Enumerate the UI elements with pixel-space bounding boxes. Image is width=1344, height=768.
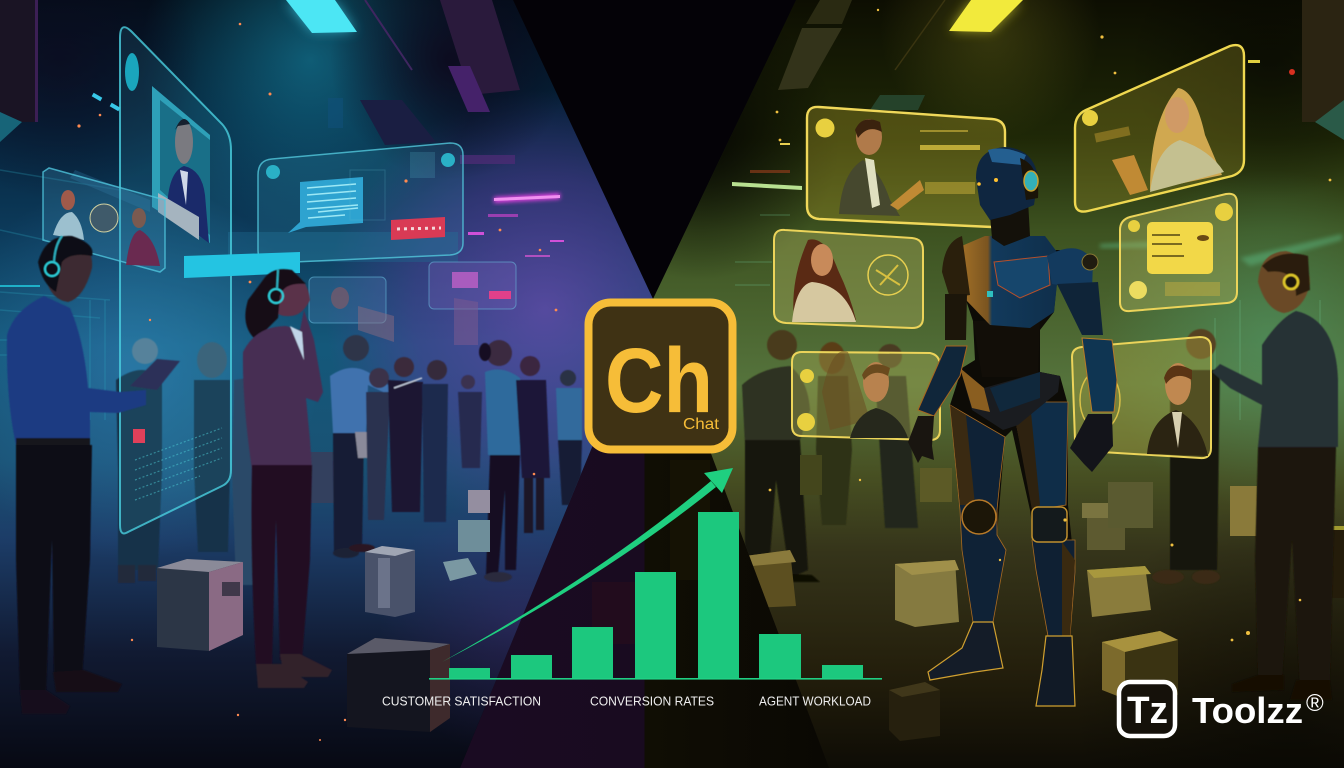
person: woman in dark dress xyxy=(516,356,550,533)
panel: lower centre wedge xyxy=(460,299,829,768)
axis label: customer satisfaction: CUSTOMER SATISFACTION xyxy=(382,694,541,708)
cyan bar xyxy=(184,252,300,278)
person: man with headset xyxy=(7,236,146,714)
person: group xyxy=(366,357,482,522)
small boxes xyxy=(468,490,490,513)
robot: legs xyxy=(928,402,1075,706)
wordmark: Toolzz xyxy=(1192,690,1303,731)
hologram: man with tablet xyxy=(807,107,1005,227)
logo mark: Tz xyxy=(1127,690,1168,732)
person: curly woman xyxy=(194,342,230,552)
box xyxy=(895,560,959,627)
ceiling structure xyxy=(778,0,1344,140)
hologram: chat panel xyxy=(258,143,463,263)
logo letters: Ch xyxy=(605,330,713,432)
icon: ceiling light xyxy=(286,0,357,33)
logo mark xyxy=(1119,682,1175,736)
neon strips xyxy=(0,93,564,287)
video tile xyxy=(152,86,210,243)
racks xyxy=(0,170,120,420)
person: far man xyxy=(556,370,582,505)
icon: panel badge xyxy=(125,53,139,91)
particles xyxy=(77,23,557,741)
logo caption: Chat xyxy=(683,416,720,433)
background crowd xyxy=(116,335,582,585)
red notice xyxy=(391,217,445,240)
box xyxy=(889,682,940,741)
person: man with headset xyxy=(1212,251,1338,700)
chart bars xyxy=(449,512,863,678)
hologram: woman brunette xyxy=(774,230,923,328)
person: man right back xyxy=(1152,329,1220,584)
person: woman with headset xyxy=(243,269,332,688)
hologram: blonde woman xyxy=(1075,45,1244,212)
background boxes xyxy=(310,452,334,503)
robot: neck xyxy=(990,200,1030,246)
person: man centre xyxy=(330,334,390,558)
hologram: message panel xyxy=(1120,194,1237,311)
boxes xyxy=(157,490,490,732)
neon strips xyxy=(732,60,1342,266)
data readout xyxy=(135,428,222,500)
person: man at left xyxy=(742,330,820,582)
robot: body underlay xyxy=(950,250,1075,636)
icon: yellow message card xyxy=(1147,222,1213,274)
bar chart xyxy=(382,468,882,708)
person: grey figure xyxy=(232,378,253,586)
panel: AI agent scene (right) xyxy=(640,0,1344,768)
ceiling structure xyxy=(0,0,520,262)
hologram: lower right panel xyxy=(1072,337,1211,458)
box stack xyxy=(365,546,415,617)
hologram: large panel xyxy=(120,27,231,533)
axis label: conversion rates: CONVERSION RATES xyxy=(590,694,714,708)
racks xyxy=(735,215,1320,420)
arrow: growth trend xyxy=(442,468,733,662)
hologram: left team panel xyxy=(43,168,165,272)
robot xyxy=(908,147,1117,706)
robot: torso xyxy=(957,236,1060,328)
logo: Ch Chat xyxy=(588,302,732,450)
icon: ceiling light xyxy=(949,0,1023,32)
boxes xyxy=(745,455,1344,741)
robot: arms xyxy=(908,236,1117,472)
registered mark: ® xyxy=(1306,690,1324,717)
hologram: small panel right xyxy=(429,262,516,345)
box: foreground dark xyxy=(347,638,450,732)
box xyxy=(157,559,243,651)
person: woman in blue xyxy=(479,340,520,582)
robot: waist xyxy=(973,321,1040,377)
person: back man xyxy=(875,344,918,528)
person: woman behind panel xyxy=(816,342,852,525)
background people xyxy=(742,329,1220,584)
logo: Toolzz xyxy=(1119,682,1324,736)
icon: chat bubble xyxy=(288,177,363,233)
person: tablet man xyxy=(116,338,180,583)
chart axis xyxy=(429,678,882,680)
particles xyxy=(769,9,1331,641)
panel: human agents scene (left) xyxy=(0,0,660,768)
robot: head xyxy=(976,147,1038,220)
hologram: lower left panel xyxy=(792,351,940,440)
box xyxy=(1087,566,1151,617)
box xyxy=(1102,631,1178,699)
axis label: agent workload: AGENT WORKLOAD xyxy=(759,694,871,708)
box xyxy=(745,550,796,608)
hologram: small panel middle xyxy=(309,277,394,342)
robot: pelvis xyxy=(960,368,1060,430)
